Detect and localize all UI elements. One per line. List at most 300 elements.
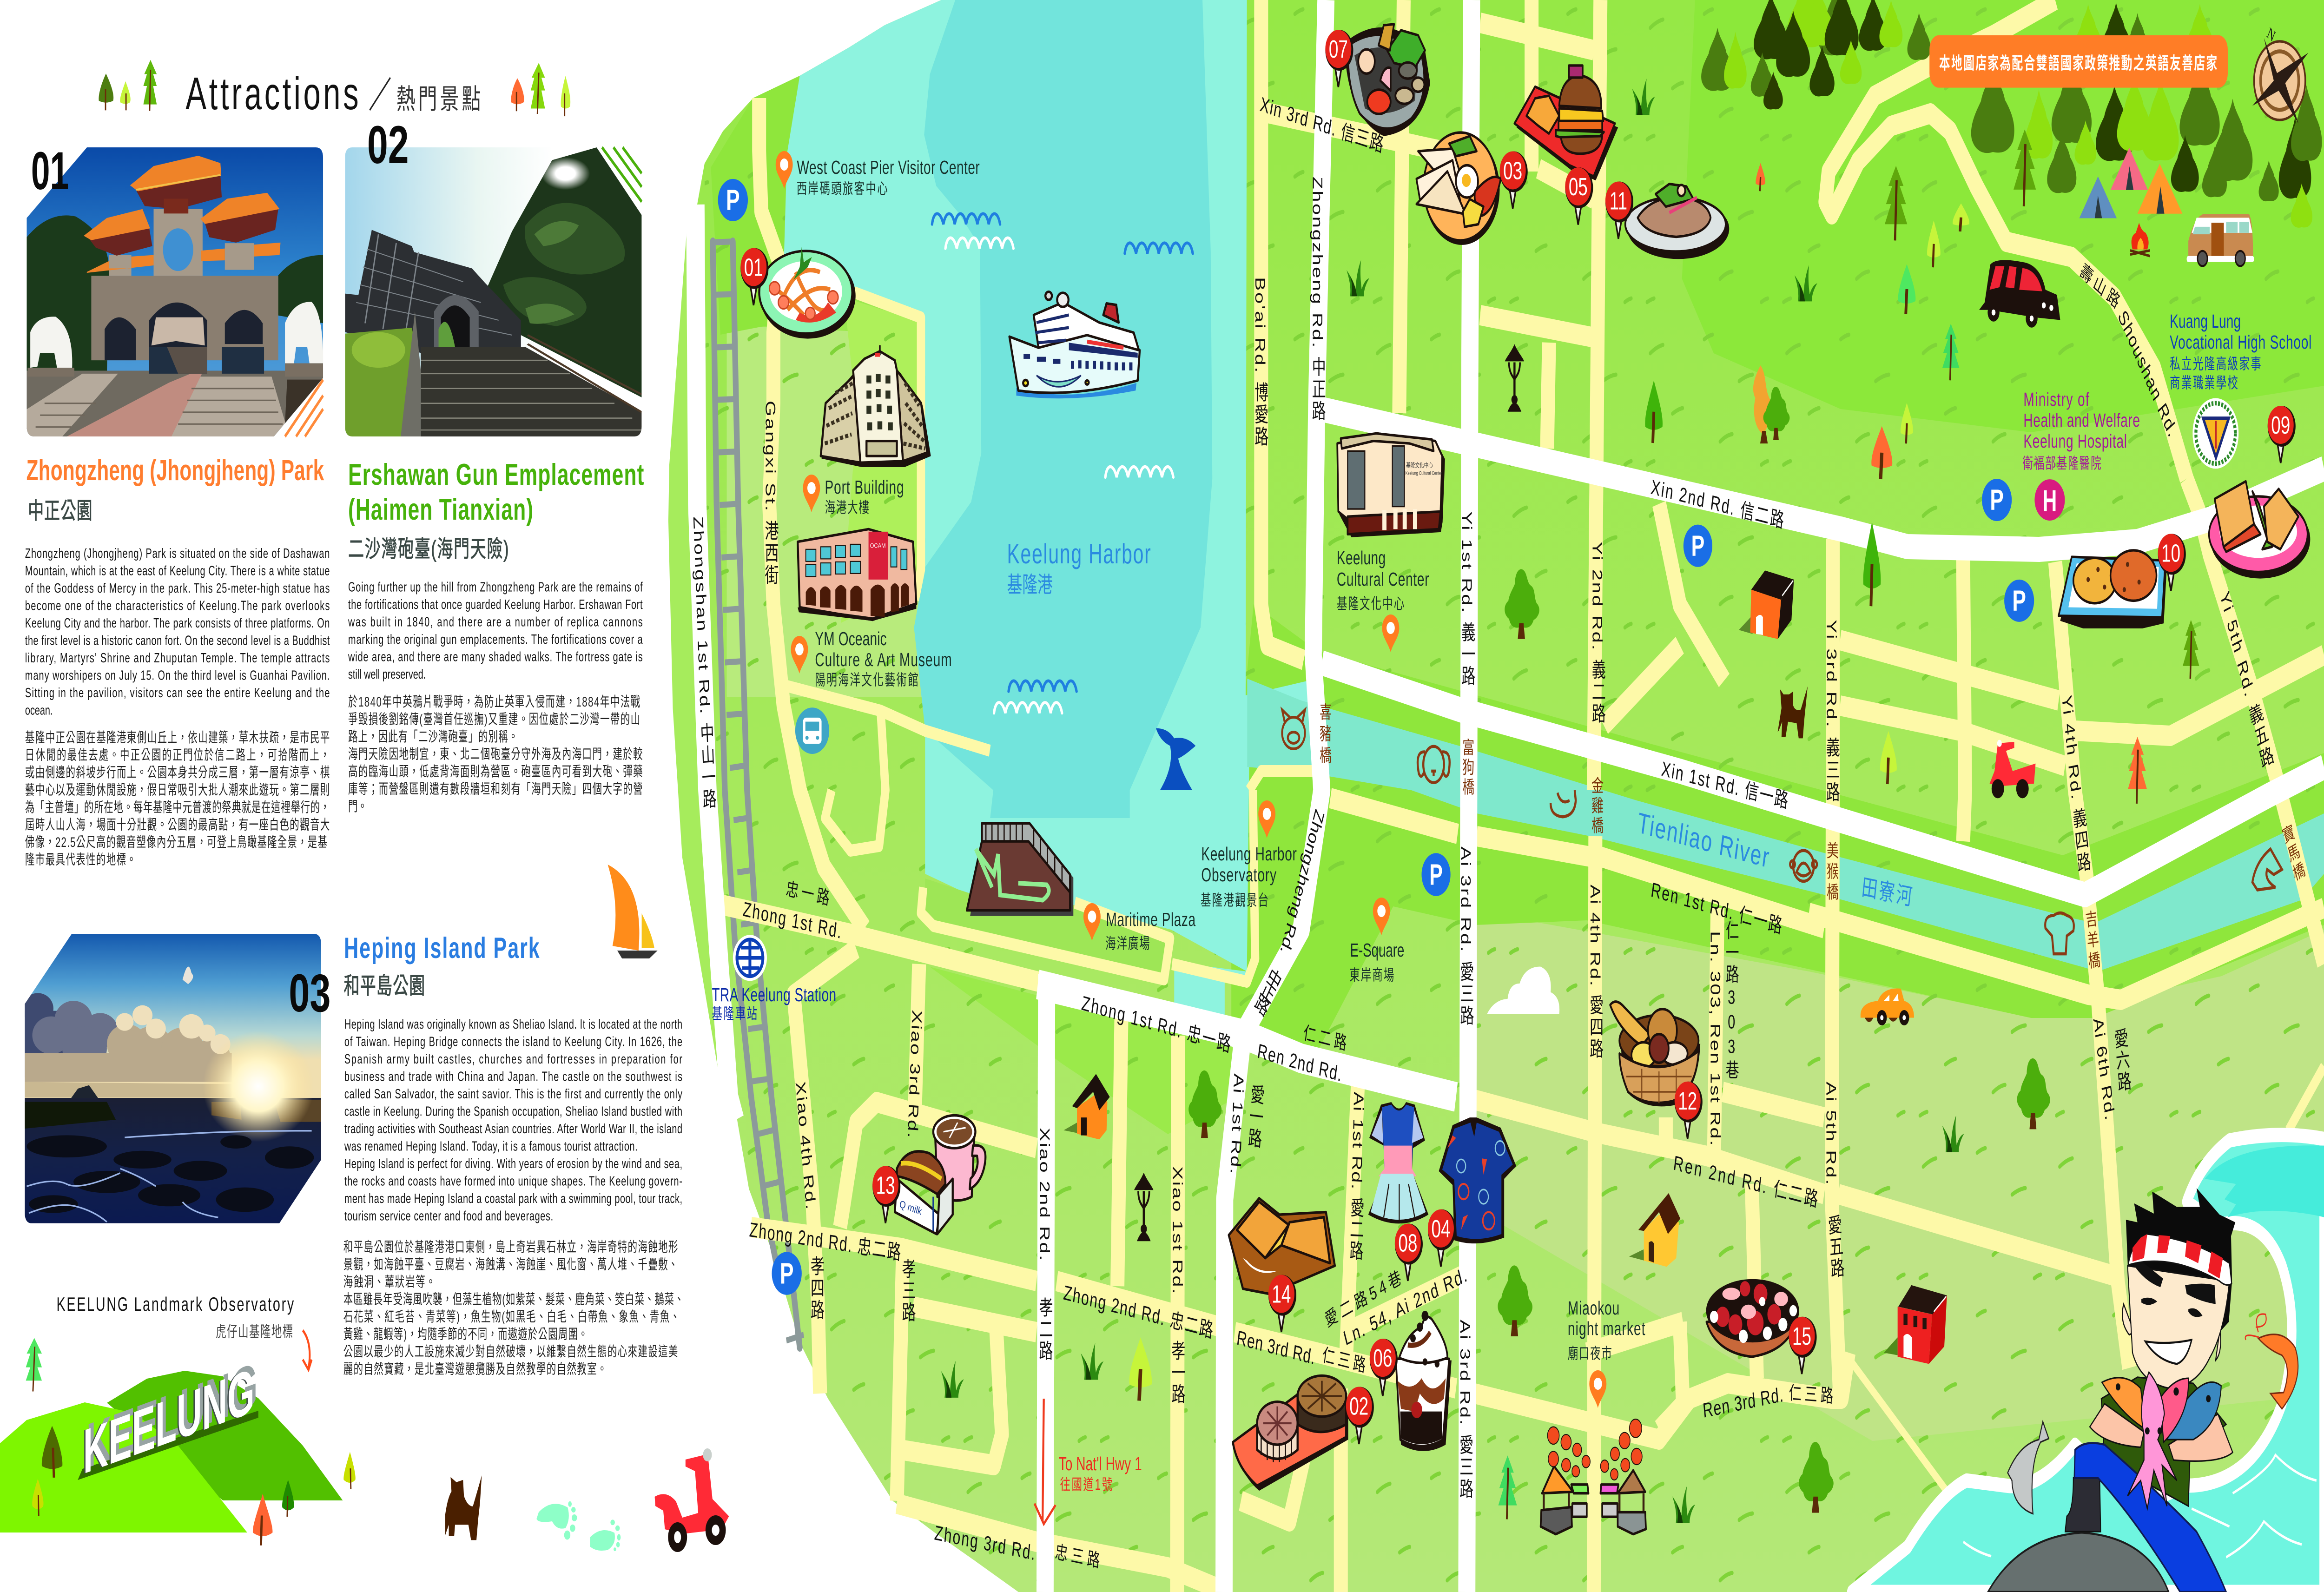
label: YM Oceanic Museum: YM Oceanic — [815, 628, 887, 649]
icon: cat — [1778, 687, 1808, 738]
text block: Zhongzheng Park English — [25, 546, 330, 718]
icon: red scooter — [655, 1448, 729, 1552]
pin 12: 12 — [1678, 1087, 1697, 1115]
road label: Zhong 1st Rd west: Zhong 1st Rd. — [742, 898, 843, 943]
icon: trees — [1863, 129, 2199, 804]
text block: Ershawan Chinese: 海門天險因地制宜，東、北二個砲臺分守外海及內海口門，建於較 — [348, 746, 643, 762]
number 02: 02 — [367, 115, 409, 175]
bridge: 金雞橋: 金雞橋 — [1590, 776, 1604, 834]
icon: strawberry tart — [1706, 1279, 1799, 1357]
pin 11: 11 — [1610, 186, 1627, 215]
icon: animal marks — [1551, 790, 1817, 881]
icon: cookie plate — [2059, 550, 2167, 628]
text block: Heping Chinese: 景觀，如海蝕平臺、豆腐岩、海蝕溝、海蝕崖、風化窗、萬人堆、千疊敷、 — [343, 1257, 678, 1273]
banner: English-friendly shops: 本地圖店家為配合雙語國家政策推動之英語友善店家 — [1939, 53, 2217, 73]
title: Attractions: 熱門景點 — [396, 83, 481, 115]
banner: English-friendly shops — [1929, 35, 2228, 88]
icon: trees — [1942, 1058, 2050, 1152]
icon: dog (bridge) — [1418, 746, 1450, 783]
text block: Ershawan English: wide area, and there are many shaded walks. The fortress gate is — [348, 650, 643, 665]
photo: Heping Island — [22, 934, 321, 1223]
icon: trees and lamps — [1347, 79, 1817, 639]
label: Miaokou night market: 廟口夜市 — [1568, 1345, 1612, 1362]
text block: Heping Chinese: 本區雖長年受海風吹襲，但藻生植物(如紫菜、髮菜、鹿角菜、筊白菜、鵝菜、 — [343, 1292, 684, 1308]
icon: mooncake tray — [1233, 1376, 1348, 1491]
icon: trees and lamp — [941, 1070, 1221, 1401]
road label: Zhong 1st Rd east: Zhong 1st Rd. 忠一路 — [1080, 991, 1232, 1056]
label: Keelung Cultural Center — [1337, 548, 1429, 612]
panel: major roads (white) — [695, 0, 2324, 1592]
label: E-Square — [1349, 940, 1404, 984]
road label: Zhong 2nd Rd west: Zhong 2nd Rd. 忠二路 — [749, 1218, 902, 1264]
label: To National Highway 1: To Nat'l Hwy 1 — [1059, 1453, 1142, 1474]
icon: parking — [1684, 525, 1712, 567]
icon: yellow house — [1629, 1193, 1680, 1267]
decor: wave lines — [1963, 1455, 2317, 1557]
label: Keelung Cultural Center: Keelung — [1337, 548, 1386, 568]
label: Keelung Harbor Observatory: Keelung Harbor — [1201, 844, 1297, 865]
label: Miaokou night market: night market — [1568, 1318, 1645, 1339]
panel: place labels — [712, 157, 2311, 1493]
label: Keelung Harbor: 基隆港 — [1007, 572, 1053, 597]
icon: coffee and sandwich: Q milk — [898, 1198, 923, 1217]
panel: harbour water — [784, 0, 2324, 1020]
panel: road labels — [690, 92, 2275, 1572]
panel: north-central map icons — [1325, 0, 1854, 783]
label: Keelung Harbor — [1007, 538, 1151, 597]
pin 06 — [1370, 1339, 1398, 1396]
pin 10 — [2158, 534, 2186, 591]
pin 10: 10 — [2161, 539, 2180, 567]
icon: shirt — [1439, 1117, 1516, 1243]
panel: south-west map icons — [733, 824, 1348, 1524]
pin: West Coast Pier — [776, 151, 793, 189]
text block: Heping English: Spanish army built castles, churches and fortresses in preparation for — [344, 1052, 682, 1067]
label: 田寮河: 田寮河 — [1861, 874, 1913, 911]
road label: Ren 2nd Rd east: Ren 2nd Rd. 仁二路 — [1672, 1151, 1819, 1211]
water: Tienliao River — [1247, 679, 2324, 971]
icon: parking — [772, 1252, 802, 1295]
label: Port Building: Port Building — [825, 477, 904, 498]
road label: Xiao 3rd Rd: Xiao 3rd Rd. — [905, 1010, 925, 1139]
icon: animal marks — [2045, 849, 2282, 954]
label: Kuang Lung school: Vocational High School — [2170, 332, 2311, 353]
road label: Yi 3rd Rd: Yi 3rd Rd. 義三路 — [1824, 620, 1840, 802]
sign: KEELUNG: KEELUNG — [83, 1355, 255, 1488]
road label: Yi 1st Rd: Yi 1st Rd. 義一路 — [1459, 511, 1475, 686]
text block: Ershawan English: marking the original gun emplacements. The fortifications cover a — [348, 632, 643, 647]
road label: Ai 3rd Rd south: Ai 3rd Rd. 愛三路 — [1458, 1320, 1473, 1499]
illustration: fisherman mascot — [2065, 1188, 2235, 1592]
road label: 孝四路: 孝四路 — [808, 1255, 824, 1320]
label: Keelung Harbor: Keelung Harbor — [1007, 538, 1151, 569]
road label: Xin 2nd Rd: Xin 2nd Rd. 信二路 — [1650, 476, 1785, 532]
water: wave crest — [2205, 1145, 2324, 1217]
text block: Heping English: of Taiwan. Heping Bridge connects the island to Keelung City. In 1626, the — [344, 1035, 682, 1050]
label: West Coast Pier Visitor Center: West Coast Pier Visitor Center — [797, 157, 980, 178]
text block: Heping Chinese: 和平島公園位於基隆港港口東側，島上奇岩異石林立，海岸奇特的海蝕地形 — [343, 1239, 678, 1255]
text block: Zhongzheng Park English: become one of the characteristics of Keelung.The park overlooks — [25, 599, 330, 614]
road label: Ln. 303: Ln. 303, Ren 1st Rd. — [1708, 931, 1723, 1146]
label: Kuang Lung school: Kuang Lung — [2170, 311, 2241, 332]
text block: Heping English: business and trade with China and Japan. The castle on the southwest is — [344, 1070, 682, 1084]
road label: Ren 2nd Rd west: Ren 2nd Rd. — [1256, 1039, 1343, 1086]
pin 15 — [1789, 1317, 1817, 1374]
icon: bus stop — [795, 707, 829, 754]
pin 02 — [1346, 1387, 1374, 1444]
text block: Heping English: was renamed Heping Island. Today, it is a famous tourist attraction. — [344, 1139, 638, 1154]
road label: Ln. 54, Ai 2nd Rd: Ln. 54, Ai 2nd Rd. — [1341, 1263, 1469, 1350]
label: Keelung Hospital: Ministry of — [2023, 389, 2089, 410]
icon: rock — [1988, 1533, 2169, 1592]
pin: Harbor Observatory — [1258, 800, 1275, 838]
road label: Ai 3rd Rd north: Ai 3rd Rd. 愛三路 — [1458, 846, 1474, 1025]
icon: whale tail — [1156, 728, 1195, 790]
road label: 仁三路 west: 仁三路 — [1321, 1345, 1367, 1376]
text block: Heping Chinese: 海蝕洞、蕈狀岩等。 — [343, 1274, 436, 1290]
icon: Maritime Plaza — [967, 824, 1073, 916]
icon: Cultural Center: Keelung Cultural Center — [1406, 470, 1442, 476]
text block: Zhongzheng Park Chinese: 日休閒的最佳去處。中正公園的正門位於信二路上，可拾階而上， — [25, 747, 330, 763]
bridge: 富狗橋: 富狗橋 — [1461, 738, 1474, 795]
subheading: 和平島公園: 和平島公園 — [343, 973, 425, 999]
icon: black taxi — [1979, 260, 2060, 328]
label: Keelung Cultural Center: Cultural Center — [1337, 569, 1429, 590]
label: Keelung Hospital: Health and Welfare — [2023, 410, 2140, 431]
road label: 孝一路: 孝一路 — [1169, 1340, 1185, 1404]
text block: Ershawan Chinese: 高的臨海山頭，低處背海面則為營區。砲臺區內可看到大砲、彈藥 — [348, 764, 643, 779]
label: TRA Keelung Station — [712, 984, 836, 1022]
icon: camper van — [2187, 214, 2254, 266]
road label: Xiao 4th Rd: Xiao 4th Rd. — [792, 1080, 819, 1210]
text block: Ershawan Chinese: 於1840年中英鴉片戰爭時，為防止英軍入侵而建，1884年中法戰 — [348, 694, 640, 710]
pin 07: 07 — [1329, 35, 1348, 63]
road label: Xiao 2nd Rd: Xiao 2nd Rd. — [1037, 1128, 1052, 1261]
pin 13 — [872, 1166, 900, 1223]
pin 07 — [1325, 30, 1353, 87]
icon: YM Oceanic Museum: OCAM — [870, 542, 886, 549]
heading: Heping Island Park: Heping Island Park — [344, 932, 540, 964]
pin: Maritime Plaza — [1083, 903, 1101, 941]
label: Keelung Harbor Observatory: 基隆港觀景台 — [1201, 892, 1268, 909]
text block: Ershawan Chinese — [348, 694, 643, 814]
label: Maritime Plaza: 海洋廣場 — [1105, 935, 1150, 952]
road label: Zhongzheng Rd diagonal: Zhongzheng Rd. — [1277, 807, 1327, 958]
icon: dark house — [1739, 570, 1794, 639]
text block: Heping Chinese — [343, 1239, 684, 1377]
label: Keelung Cultural Center: 基隆文化中心 — [1337, 595, 1404, 612]
label: YM Oceanic Museum — [815, 628, 952, 688]
road label: 中正路 diagonal: 中正路 — [1251, 963, 1284, 1019]
label: To National Highway 1 — [1059, 1453, 1142, 1493]
road label: Xin 1st Rd: Xin 1st Rd. 信一路 — [1660, 757, 1789, 813]
panel: railway — [713, 239, 800, 1348]
road label: Ai 6th Rd: Ai 6th Rd. — [2090, 1016, 2118, 1122]
text block: Zhongzheng Park English: Mountain, which is at the east of Keelung City. There is a white statue — [25, 564, 330, 579]
railway rails — [713, 242, 800, 1348]
road label: Xin 3rd Rd: Xin 3rd Rd. 信三路 — [1259, 92, 1385, 157]
text block: Zhongzheng Park English: the first level is a historic canon fort. On the second level is a Buddhist — [25, 634, 330, 648]
road label: Ai 4th Rd: Ai 4th Rd. 愛四路 — [1588, 885, 1603, 1058]
text block: Zhongzheng Park English: Zhongzheng (Jhongjheng) Park is situated on the side of Dashawan — [25, 546, 330, 561]
label: Miaokou night market: Miaokou — [1568, 1298, 1619, 1319]
pin 01 — [740, 248, 768, 305]
number 01: 01 — [31, 141, 69, 201]
road label: Ai 1st Rd: Ai 1st Rd. — [1228, 1073, 1247, 1175]
label: Keelung Hospital: 衛福部基隆醫院 — [2022, 455, 2101, 472]
road label: Zhongzheng Rd north: Zhongzheng Rd. 中正路 — [1310, 177, 1326, 421]
icon: YM Oceanic Museum — [798, 529, 916, 621]
number 03: 03 — [289, 963, 330, 1023]
water: Keelung Harbor — [784, 0, 1317, 1020]
icon: seafood hotpot — [1346, 24, 1430, 136]
bridge: 吉羊橋: 吉羊橋 — [2083, 909, 2100, 970]
icon: parking — [718, 179, 748, 221]
icon: left column trees — [26, 1338, 356, 1546]
label: YM Oceanic Museum: 陽明海洋文化藝術館 — [815, 671, 918, 688]
icon: forest pines — [1803, 0, 2322, 228]
text block: Heping Chinese: 麗的自然寶藏，是北臺灣遊憩攬勝及自然教學的自然教室。 — [343, 1361, 607, 1377]
icon: orange car — [1861, 989, 1914, 1025]
label: Keelung Harbor Observatory: Observatory — [1201, 865, 1277, 885]
panel: attractions text column — [0, 60, 729, 1552]
icon: burger tray — [1514, 66, 1618, 180]
text block: Heping English: the rocks and coasts have formed into unique shapes. The Keelung govern- — [344, 1174, 682, 1189]
icon: grey fish — [2007, 1422, 2049, 1514]
bridge: 寶馬橋: 寶馬橋 — [2279, 822, 2306, 884]
road label: 仁一路303巷: 仁一路303巷 — [1724, 920, 1739, 1079]
icon: school emblem — [2192, 398, 2238, 469]
label: Keelung Harbor Observatory — [1201, 844, 1297, 909]
label: Kuang Lung school: 商業職業學校 — [2170, 374, 2238, 391]
text block: Zhongzheng Park English: ocean. — [25, 703, 53, 718]
text block: Heping English — [344, 1017, 682, 1224]
text block: Heping English: tourism service center and food and beverages. — [344, 1209, 553, 1224]
decor: green stripes — [602, 147, 642, 202]
heading: Zhongzheng Park: Zhongzheng (Jhongjheng) Park — [26, 455, 324, 487]
icon: cloud — [1487, 967, 1559, 1014]
road label: Ren 3rd Rd west: Ren 3rd Rd. — [1235, 1326, 1316, 1369]
text block: Heping English: Heping Island is perfect for diving. With years of erosion by the wind and sea, — [344, 1156, 682, 1171]
road label: Ren 3rd Rd east: Ren 3rd Rd. — [1702, 1383, 1784, 1422]
pin: YM Museum — [791, 636, 808, 674]
heading: Ershawan Gun Emplacement — [348, 458, 644, 526]
icon: trees — [1498, 1265, 1834, 1523]
pin 04 — [1428, 1209, 1456, 1267]
icon: pineapple cake board — [1229, 1198, 1335, 1294]
pin 13: 13 — [876, 1171, 895, 1199]
icon: rice plate — [1625, 184, 1729, 259]
pin 08: 08 — [1398, 1229, 1417, 1257]
text block: Heping English: Heping Island was originally known as Sheliao Island. It is located at the north — [344, 1017, 682, 1032]
text block: Heping Chinese: 公園以最少的人工設施來減少對自然破壞，以維繫自然生態的心來建設這美 — [343, 1344, 678, 1360]
icon: compass — [2252, 24, 2308, 124]
label: Kuang Lung school: 私立光隆高級家事 — [2170, 355, 2261, 372]
road label: 仁二路 west: 仁二路 — [1302, 1023, 1348, 1054]
icon: bread basket — [1610, 1002, 1700, 1106]
text block: Zhongzheng Park English: library, Martyrs' Shrine and Zhuputan Temple. The temple attracts — [25, 651, 330, 666]
road label: 忠一路 west: 忠一路 — [785, 879, 831, 909]
road label: 愛二路54巷: 愛二路54巷 — [1323, 1268, 1403, 1331]
icon: red house — [1884, 1285, 1947, 1364]
icon: bubble tea — [1396, 1311, 1452, 1451]
land: Maritime Plaza block — [925, 879, 1171, 981]
label: Port Building: 海港大樓 — [825, 499, 869, 516]
icon: Cultural Center — [1337, 433, 1445, 537]
panel: minor roads (pale yellow) — [723, 0, 2324, 1592]
railway ties — [723, 239, 797, 1348]
panel: harbour decoration — [718, 179, 1195, 790]
text block: Heping English: castle in Keelung. During the Spanish occupation, Sheliao Island bustled with — [344, 1104, 682, 1119]
icon: tents — [2079, 148, 2182, 218]
icon: sandwich plate — [2209, 481, 2310, 579]
pin: Cultural Center — [1382, 614, 1399, 652]
text block: Zhongzheng Park Chinese: 基隆中正公園在基隆港東側山丘上，依山建築，草木扶疏，是市民平 — [25, 730, 330, 746]
text block: Zhongzheng Park English: Keelung City and the harbor. The park consists of three platforms. On — [25, 616, 330, 631]
road label: Yi 2nd Rd: Yi 2nd Rd. 義二路 — [1590, 542, 1605, 723]
text block: Zhongzheng Park Chinese — [25, 730, 330, 868]
label: E-Square: 東岸商場 — [1349, 966, 1394, 984]
label: Maritime Plaza — [1105, 909, 1195, 952]
heading: Ershawan Gun Emplacement: Ershawan Gun Emplacement — [348, 458, 644, 491]
pin 03: 03 — [1503, 156, 1522, 185]
pin 05 — [1565, 167, 1593, 225]
icon: coffee and sandwich — [895, 1116, 985, 1234]
icon: compass: N — [2265, 24, 2277, 46]
pin 12 — [1675, 1082, 1703, 1139]
road label: Ai 1st Rd 愛二路: Ai 1st Rd. 愛二路 — [1347, 1091, 1367, 1261]
road label: Gangxi St: Gangxi St. 港西街 — [763, 401, 779, 585]
map tint: bright hillside — [1682, 0, 2324, 432]
road label: Bo'ai Rd: Bo'ai Rd. 博愛路 — [1253, 277, 1268, 446]
label: Keelung Landmark Observatory: KEELUNG Landmark Observatory — [57, 1293, 294, 1315]
pin 15: 15 — [1792, 1322, 1811, 1350]
road label: 孝二路: 孝二路 — [1037, 1297, 1052, 1361]
text block: Heping Chinese: 黃雞、龍蝦等)，均隨季節的不同，而遨遊於公園周圍。 — [343, 1327, 588, 1342]
text block: Heping English: trading activities with Southeast Asian countries. After World War II, the island — [344, 1122, 682, 1136]
text block: Ershawan Chinese: 庫等；而營盤區則遺有數段牆垣和刻有「海門天險」四個大字的營 — [348, 781, 643, 797]
icon: title trees — [99, 60, 570, 116]
label: Maritime Plaza: Maritime Plaza — [1106, 909, 1195, 930]
text block: Ershawan Chinese: 路上，因此有「二沙灣砲臺」的別稱。 — [348, 729, 518, 745]
text block: Zhongzheng Park Chinese: 或由側邊的斜坡步行而上。公園本身共分成三層，第一層有涼亭、棋 — [25, 765, 330, 780]
text block: Zhongzheng Park English: Sitting in the pavilion, visitors can see the entire Keelung and the — [25, 686, 330, 700]
icon: footprints — [536, 1501, 621, 1551]
text block: Ershawan Chinese: 爭毀損後劉銘傳(臺灣首任巡撫)又重建。因位處於二沙灣一帶的山 — [348, 712, 640, 727]
road label: Shoushan Rd: Shoushan Rd. — [2115, 306, 2180, 441]
road label: 壽山路: 壽山路 — [2077, 260, 2122, 312]
text block: Heping English: called San Salvador, the saint savior. This is the first and currently the only — [344, 1087, 682, 1102]
text block: Zhongzheng Park Chinese: 為「主普壇」的所在地。每年基隆中元普渡的祭典就是在這裡舉行的， — [25, 799, 330, 815]
pin: Miaokou — [1589, 1370, 1606, 1408]
water: harbour deep channel — [914, 0, 1212, 818]
text block: Ershawan English: was built in 1840, and there are a number of replica cannons — [348, 615, 643, 630]
label: E-Square: E-Square — [1350, 940, 1404, 961]
road label: Xiao 1st Rd: Xiao 1st Rd. — [1170, 1166, 1186, 1294]
text block: Ershawan English — [348, 580, 643, 682]
arrow: to national highway — [1035, 1399, 1056, 1524]
road label: Ai 5th Rd: Ai 5th Rd. — [1823, 1082, 1839, 1185]
icon: orange house — [1063, 1074, 1110, 1139]
icon: brown cat — [445, 1475, 482, 1540]
subheading: 中正公園: 中正公園 — [28, 498, 92, 524]
pin 08 — [1395, 1224, 1423, 1281]
bridge: 美猴橋: 美猴橋 — [1825, 841, 1838, 900]
title: Attractions — [185, 68, 481, 119]
wave marks — [932, 214, 1193, 713]
pin 11 — [1605, 182, 1633, 238]
pin: E-Square — [1373, 898, 1390, 935]
pin 05: 05 — [1569, 172, 1588, 201]
arrow: to landmark — [303, 1330, 311, 1370]
label: Keelung Hospital — [2022, 389, 2140, 472]
pin 02: 02 — [1349, 1392, 1368, 1420]
label: TRA Keelung Station: 基隆車站 — [712, 1005, 757, 1022]
text block: Heping English: ment has made Heping Island a coastal park with a swimming pool, tour track, — [344, 1191, 682, 1206]
label: 虎仔山基隆地標: 虎仔山基隆地標 — [216, 1323, 293, 1340]
panel: south-east map icons — [1852, 849, 2324, 1592]
road label: 愛六路: 愛六路 — [2112, 1027, 2132, 1093]
icon: pasta plate — [759, 247, 856, 339]
texture: grass dashes — [705, 0, 2324, 1592]
road label: Zhong 3rd Rd: Zhong 3rd Rd. — [934, 1521, 1037, 1565]
sign: KEELUNG: KEELUNG — [82, 1355, 253, 1488]
text block: Zhongzheng Park Chinese: 佛像，22.5公尺高的觀音塑像內分五層，可登上鳥瞰基隆全景，是基 — [25, 834, 327, 850]
road label: 忠三路: 忠三路 — [1054, 1542, 1101, 1572]
pin 03 — [1500, 151, 1528, 208]
label: YM Oceanic Museum: Culture & Art Museum — [815, 649, 952, 670]
pin 09: 09 — [2271, 411, 2290, 439]
text block: Zhongzheng Park Chinese: 藝中心以及運動休閒設施，假日常吸引大批人潮來此遊玩。第二層則 — [25, 782, 330, 798]
label: West Coast Pier Visitor Center: 西岸碼頭旅客中心 — [797, 180, 888, 197]
icon: cruise ship — [1010, 292, 1140, 398]
pin 09 — [2268, 406, 2296, 463]
map tint: pale lower plain — [1475, 911, 2324, 1441]
text block: Zhongzheng Park English: many worshipers on July 15. On the third level is Guanhai Pavilion. — [25, 668, 330, 683]
subheading: 二沙灣砲臺(海門天險): 二沙灣砲臺(海門天險) — [348, 536, 508, 562]
road label: 愛一路: 愛一路 — [1246, 1083, 1265, 1149]
text block: Ershawan English: Going further up the hill from Zhongzheng Park are the remains of — [348, 580, 643, 595]
panel: north-east map icons — [1803, 0, 2322, 804]
pin 06: 06 — [1373, 1344, 1392, 1372]
road label: 愛五路: 愛五路 — [1825, 1214, 1845, 1279]
sign: KEELUNG: KEELUNG — [86, 1349, 257, 1482]
pin 14 — [1268, 1275, 1296, 1332]
text block: Zhongzheng Park Chinese: 隆市最具代表性的地標。 — [25, 852, 136, 868]
road label: Ren 1st Rd: Ren 1st Rd. 仁一路 — [1650, 878, 1783, 938]
icon: TRA logo — [733, 935, 767, 981]
icon: parking — [1421, 853, 1451, 896]
pin 01: 01 — [744, 253, 763, 281]
text block: Zhongzheng Park Chinese: 屆時人山人海，場面十分壯觀。公園的最高點，有一座白色的觀音大 — [25, 817, 330, 833]
text block: Zhongzheng Park English: of the Goddess of Mercy in the park. This 25-meter-high statue has — [25, 581, 330, 596]
label: Port Building — [825, 477, 904, 516]
icon: campfire — [2130, 223, 2150, 256]
decor: orange stripes — [285, 380, 323, 436]
panel: map base land — [668, 0, 2324, 1592]
icon: brunch plate — [1416, 132, 1501, 245]
road label: Zhongshan 1st Rd: Zhongshan 1st Rd. 中山一路 — [690, 516, 716, 809]
road label: 仁三路 east: 仁三路 — [1789, 1383, 1834, 1407]
road label: 孝三路: 孝三路 — [900, 1258, 915, 1322]
road label: Yi 4th Rd: Yi 4th Rd. 義四路 — [2059, 694, 2091, 874]
icon: Cultural Center: 基隆文化中心 — [1406, 461, 1433, 469]
panel: south-central map icons — [1346, 790, 1834, 1534]
icon: red scooter — [1990, 740, 2036, 798]
title: Attractions: Attractions — [185, 68, 359, 119]
icons: parking and hospital — [1982, 479, 2065, 622]
left green sliver — [668, 225, 730, 1110]
